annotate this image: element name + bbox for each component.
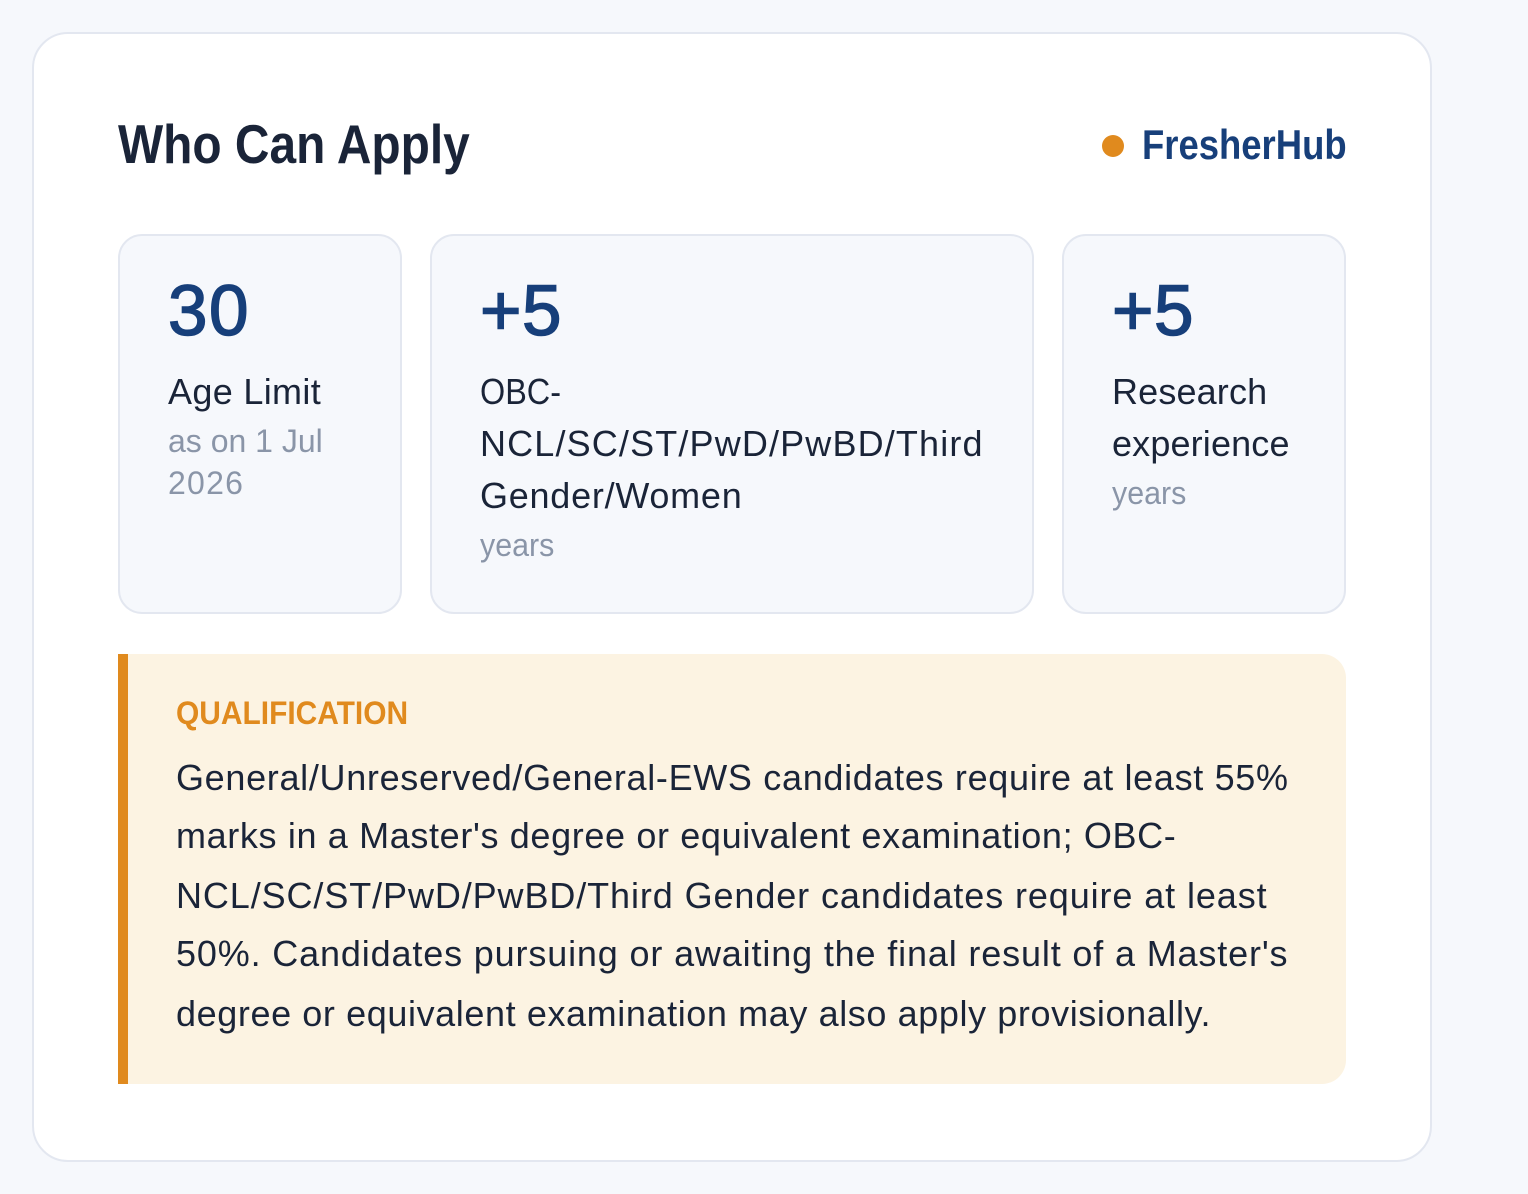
- age limit note: [168, 423, 323, 501]
- category relaxation number: +5: [480, 272, 562, 351]
- age limit number: 30: [168, 272, 250, 351]
- research experience unit: years: [1112, 475, 1186, 511]
- category relaxation unit: years: [480, 527, 554, 563]
- qualification text: degree or equivalent examination may also apply provisionally.: [176, 993, 1211, 1034]
- category relaxation label: OBC-: [480, 371, 561, 412]
- research experience label: experience: [1112, 423, 1290, 464]
- research experience label: Research: [1112, 371, 1267, 412]
- qualification text: 50%. Candidates pursuing or awaiting the final result of a Master's: [176, 933, 1288, 974]
- qualification text: General/Unreserved/General-EWS candidates require at least 55%: [176, 757, 1289, 798]
- panel: age limit: [118, 234, 402, 614]
- qualification text: NCL/SC/ST/PwD/PwBD/Third Gender candidates require at least: [176, 875, 1268, 916]
- category relaxation label: NCL/SC/ST/PwD/PwBD/Third: [480, 423, 984, 464]
- age limit label: Age Limit: [168, 371, 321, 412]
- panel: qualification callout: [118, 654, 1346, 1084]
- research experience label: [1112, 371, 1290, 464]
- age limit note: 2026: [168, 465, 244, 501]
- category relaxation label: Gender/Women: [480, 475, 742, 516]
- qualification text: marks in a Master's degree or equivalent examination; OBC-: [176, 815, 1176, 856]
- category relaxation label: [480, 371, 984, 516]
- age limit note: as on 1 Jul: [168, 423, 323, 459]
- brand name: FresherHub: [1142, 121, 1347, 168]
- qualification heading: QUALIFICATION: [176, 695, 408, 731]
- panel: category relaxation: [430, 234, 1034, 614]
- qualification text: [176, 757, 1289, 1034]
- panel: research experience: [1062, 234, 1346, 614]
- icon: brand dot: [1102, 135, 1124, 157]
- research experience number: +5: [1112, 272, 1194, 351]
- title: Who Can Apply: [118, 113, 470, 175]
